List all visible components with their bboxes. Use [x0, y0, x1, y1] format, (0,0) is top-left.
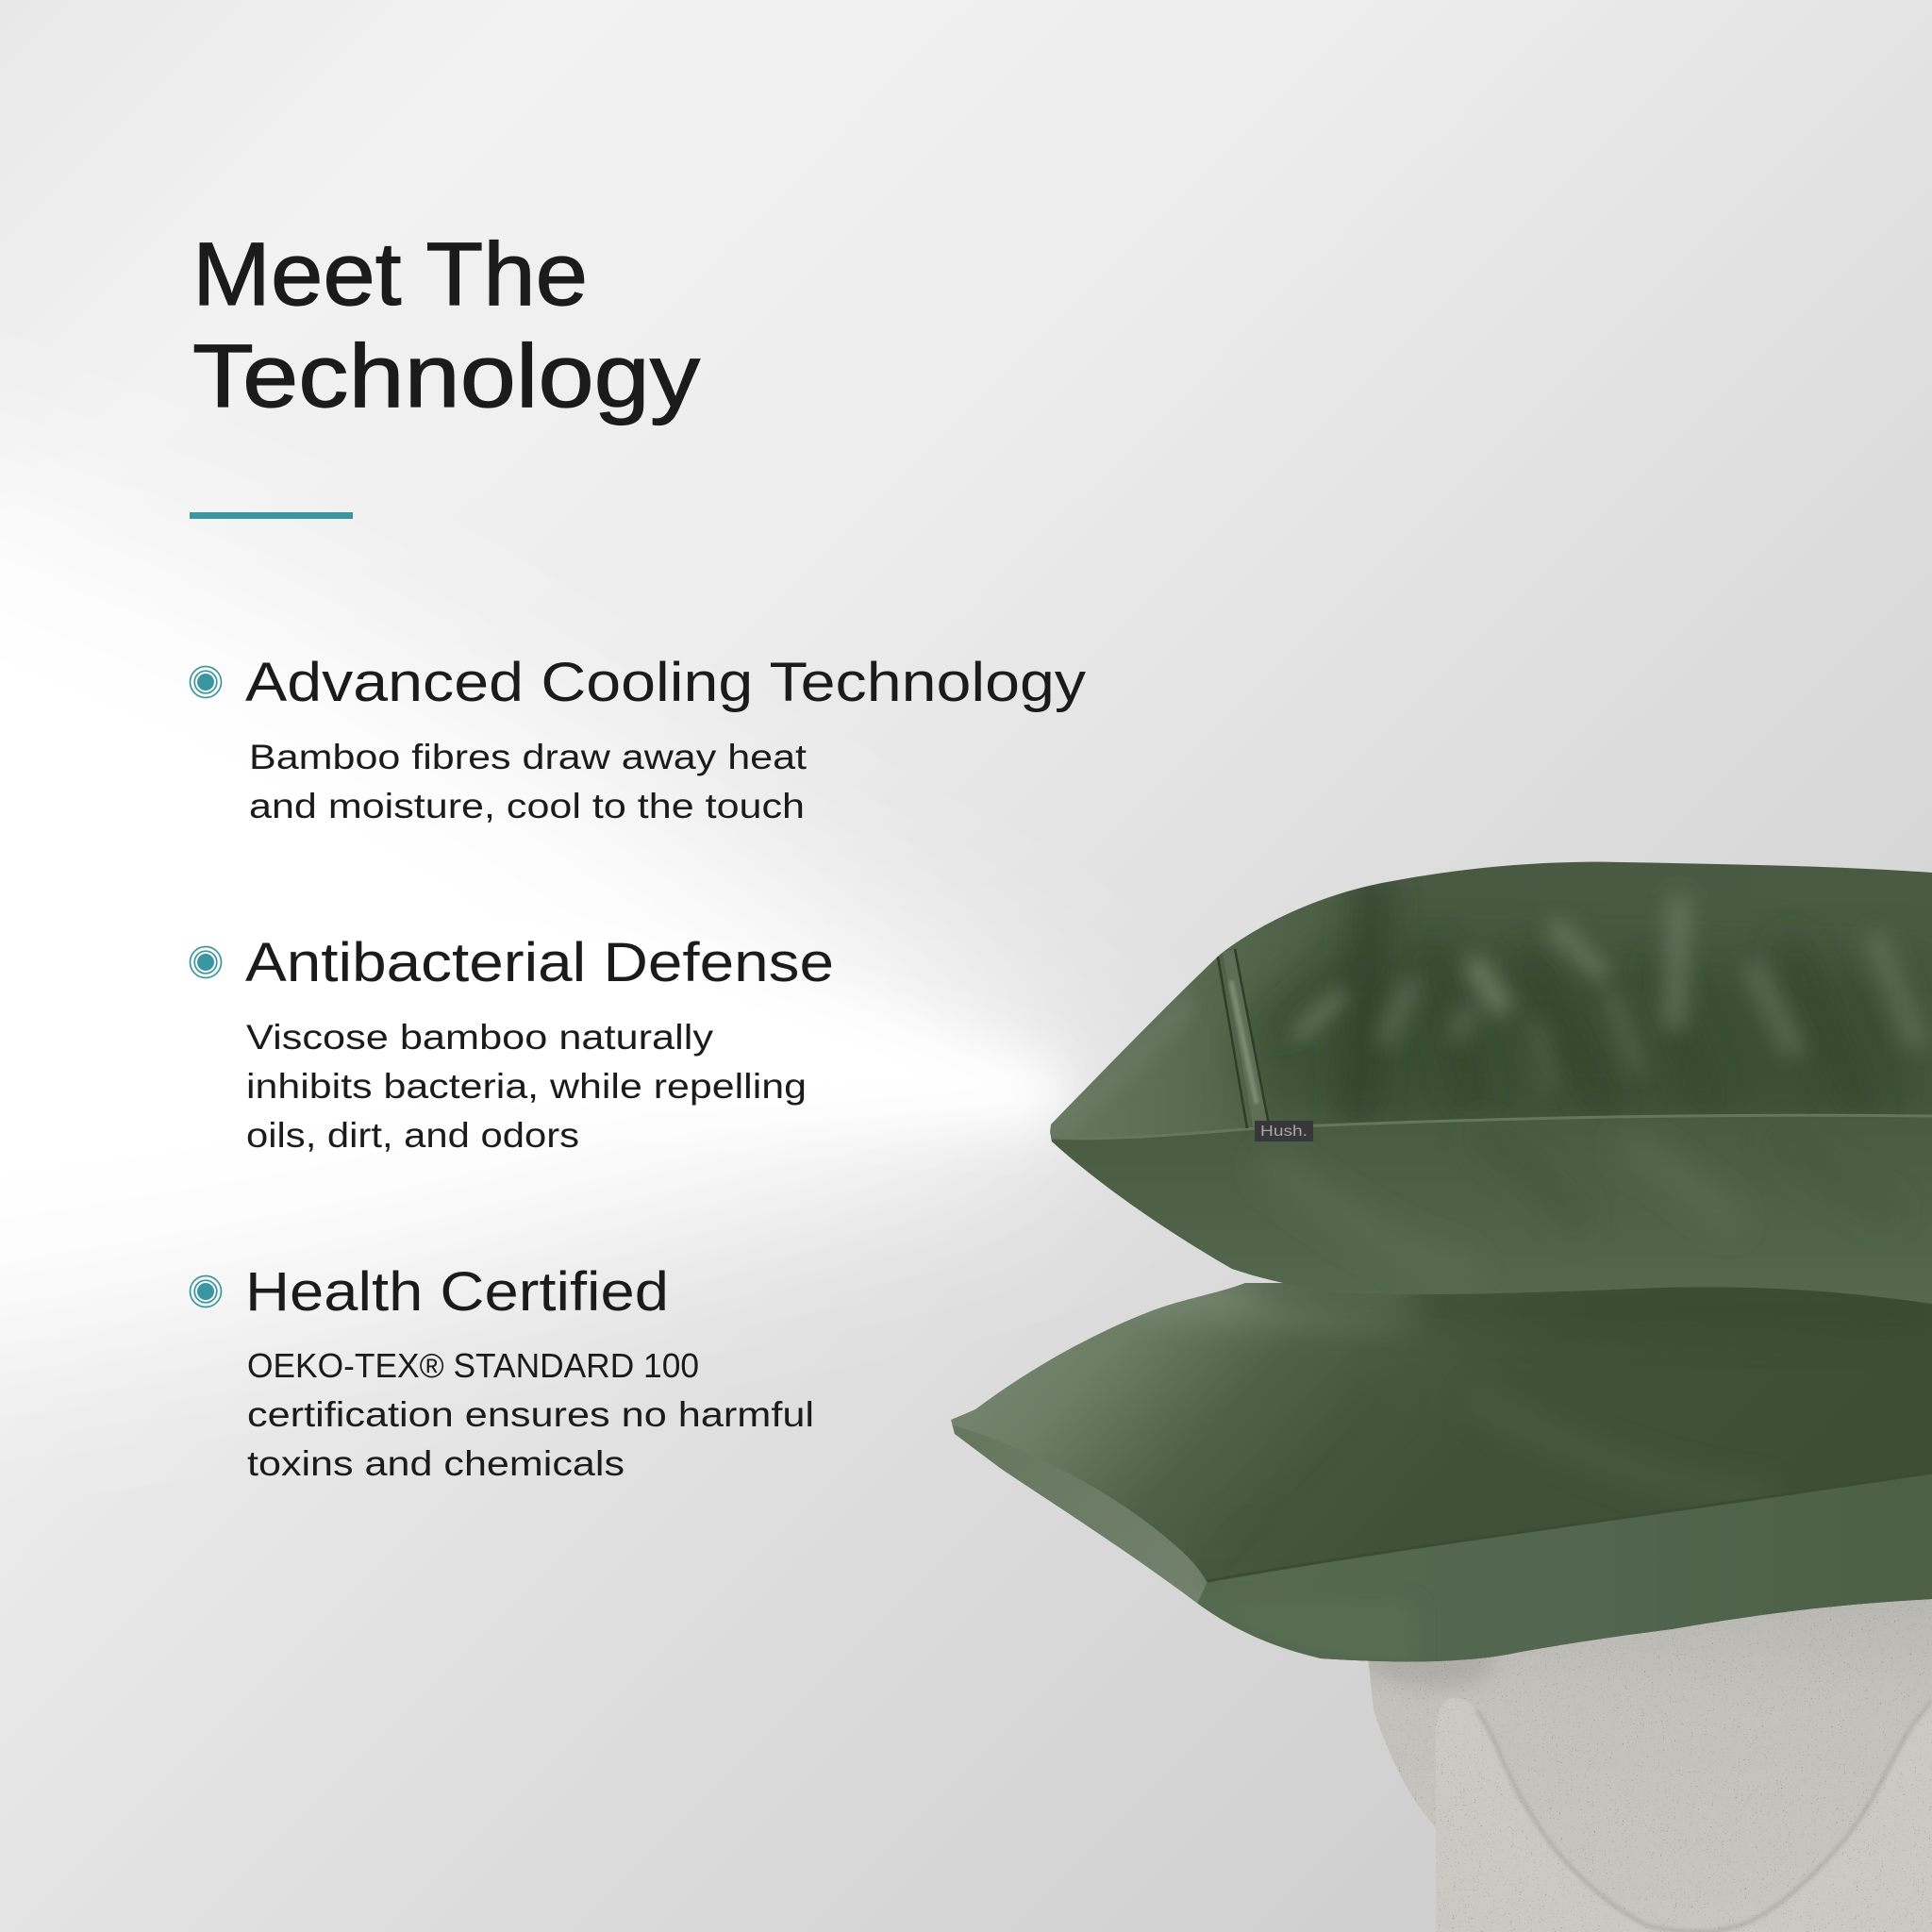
icon: target bullet [191, 666, 221, 698]
heading: Health Certified [245, 1261, 669, 1323]
teal divider [190, 512, 353, 519]
description: oils, dirt, and odors [246, 1116, 579, 1155]
pillow: upper [1038, 862, 1932, 1321]
feature: advanced cooling [191, 652, 1086, 825]
icon: target bullet [191, 1275, 221, 1307]
description: and moisture, cool to the touch [249, 787, 805, 825]
description: certification ensures no harmful [247, 1395, 814, 1434]
stool legs [1436, 1698, 1932, 1734]
description [249, 738, 808, 825]
label: Hush tag: Hush. [1260, 1124, 1307, 1140]
front flap [1198, 1474, 1932, 1662]
bottom panel [1038, 1115, 1932, 1321]
pillow cuff [1223, 949, 1269, 1126]
title: Meet The [192, 225, 588, 325]
wrinkles dark [1336, 881, 1536, 1118]
description: OEKO-TEX® STANDARD 100 [247, 1346, 699, 1385]
title [192, 225, 701, 426]
description: toxins and chemicals [247, 1444, 625, 1483]
description: Bamboo fibres draw away heat [249, 738, 808, 776]
description [246, 1018, 807, 1155]
corner fold [1055, 1000, 1189, 1124]
pillow: lower [943, 1283, 1932, 1679]
stitched seam [1050, 1115, 1932, 1139]
label: Hush tag [1255, 1121, 1313, 1141]
concrete stool [1361, 1594, 1932, 1932]
description: inhibits bacteria, while repelling [246, 1067, 807, 1106]
inner flap [953, 1424, 1209, 1612]
icon: target bullet [191, 947, 221, 977]
heading: Antibacterial Defense [245, 932, 834, 993]
dark zone near the seam [1241, 943, 1932, 1123]
wrinkles light [1300, 906, 1915, 1085]
seam [1208, 1473, 1932, 1581]
description [247, 1346, 814, 1483]
heading: Advanced Cooling Technology [245, 652, 1086, 713]
title: Technology [192, 326, 701, 426]
description: Viscose bamboo naturally [246, 1018, 714, 1057]
shading on upper panel [1132, 1283, 1415, 1324]
feature: health certified [191, 1261, 814, 1483]
feature: antibacterial defense [191, 932, 834, 1155]
